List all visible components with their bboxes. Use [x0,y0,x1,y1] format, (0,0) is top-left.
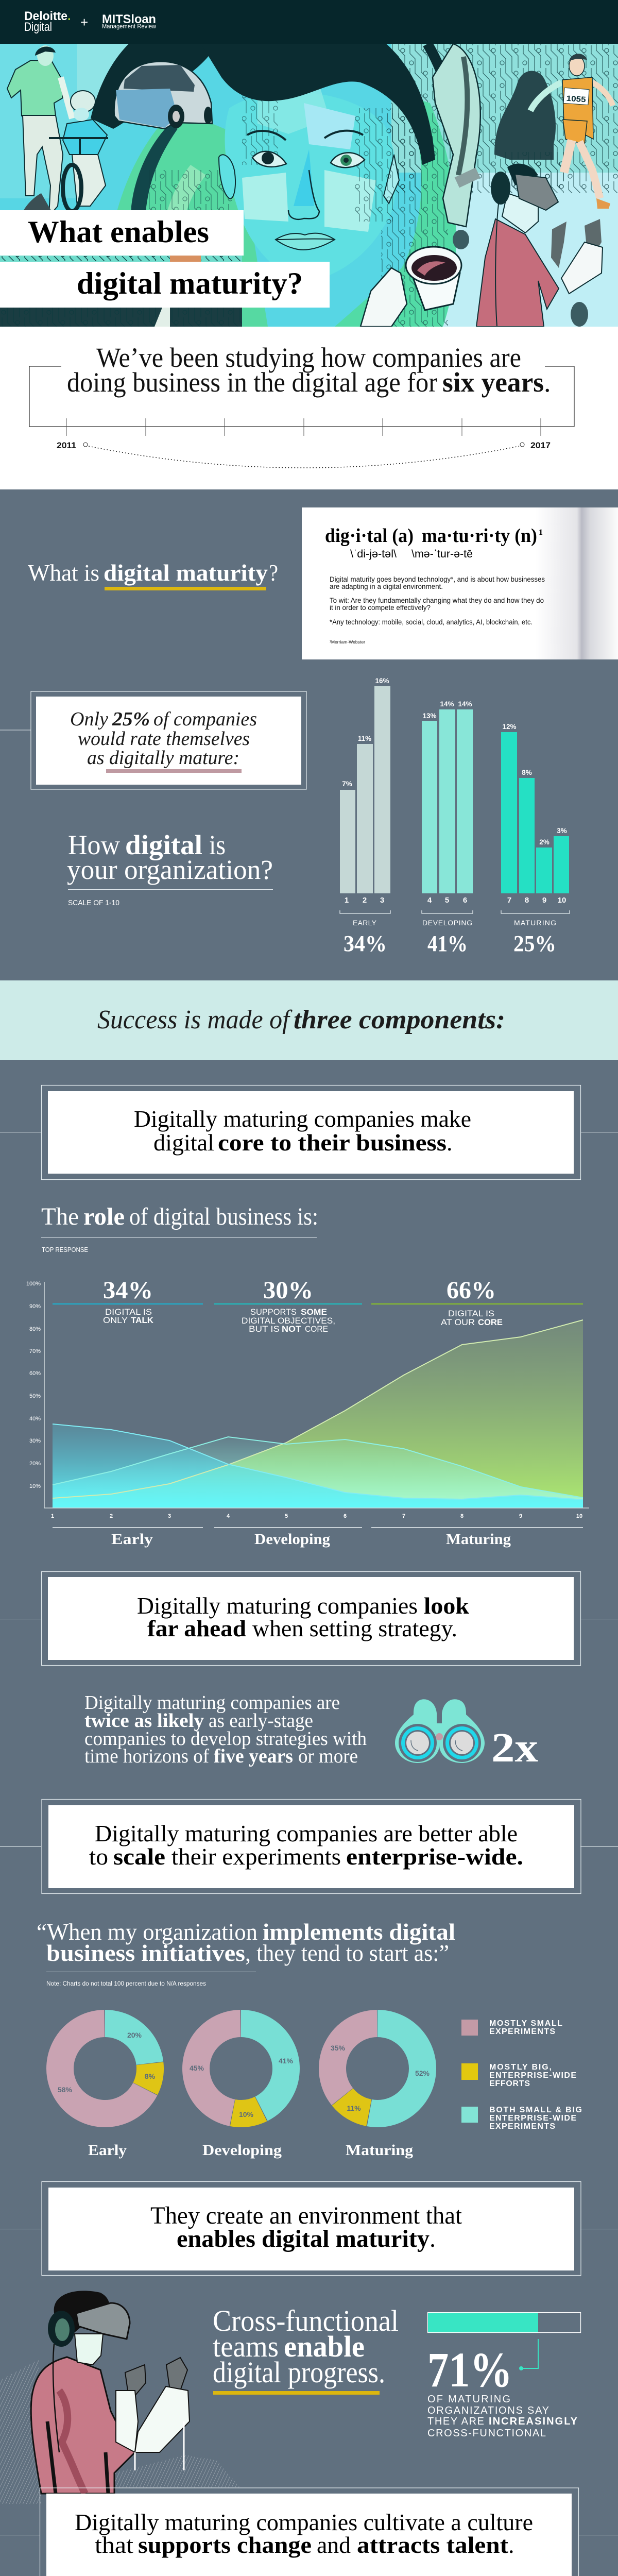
bar chart: self rating: 8% [522,769,532,776]
area chart: role of digital business: DIGITAL IS [105,1307,152,1317]
bar chart: self rating: 14% [458,700,472,708]
legend: donut charts: ENTERPRISE-WIDE [489,2114,576,2123]
heading: role of digital business: The [41,1203,79,1230]
donut charts: how initiatives start: 58% [58,2086,73,2094]
donut charts: how initiatives start: Developing [202,2142,282,2159]
heading: implements digital business initiatives: “When my organization [37,1919,258,1945]
heading: what is digital maturity: What is [28,560,99,586]
donut charts: how initiatives start: 35% [331,2044,346,2052]
area chart: role of digital business: 70% [29,1348,41,1354]
panel: core to their business: . [447,1129,452,1156]
header bar with logos: Management Review [102,23,156,30]
area chart: role of digital business: SOME [301,1307,327,1317]
area chart: role of digital business: DIGITAL OBJECTIVES, [242,1316,335,1326]
heading: what is digital maturity [28,560,278,590]
heading: cross-functional teams: digital progress. [213,2355,385,2389]
heading: cross-functional teams: teams [213,2330,279,2363]
area chart: role of digital business: NOT [282,1324,302,1334]
bar chart: self rating: 10 [558,896,566,905]
donut charts: how initiatives start: 11% [347,2104,361,2112]
header bar with logos: MITSloan [102,12,156,26]
heading: cross-functional teams: Cross-functional [213,2304,399,2337]
title: digital maturity? [77,266,303,300]
area chart: role of digital business: Maturing [446,1531,511,1548]
area chart: role of digital business: 30% [29,1438,41,1444]
callout: only 25 percent: Only [70,708,108,730]
text block: twice as likely: as early-stage [209,1710,313,1732]
definition card: ¹Merriam-Webster [330,639,365,645]
donut charts: how initiatives start: 20% [127,2031,142,2039]
heading: role of digital business [41,1203,318,1253]
intro frame and timeline: 2017 [530,440,551,450]
bar chart: self rating: 6 [463,896,467,905]
definition card: *Any technology: mobile, social, cloud, analytics, AI, blockchain, etc. [330,618,533,626]
title: What enables [28,215,209,249]
bar chart: self rating: 2 [363,896,367,905]
stat: 71 percent progress bar: CROSS-FUNCTIONAL [427,2428,546,2439]
panel: enables digital maturity: . [430,2225,436,2252]
stat: 71 percent progress bar: INCREASINGLY [489,2416,578,2427]
heading: how digital is your organization: SCALE OF 1-10 [68,899,119,907]
legend: donut charts: BOTH SMALL & BIG [489,2106,582,2114]
donut charts: how initiatives start: 52% [415,2069,430,2077]
panel: look far ahead: when setting strategy. [252,1615,457,1641]
area chart: role of digital business [26,1277,589,1548]
area chart: role of digital business: TALK [131,1315,154,1325]
donut charts: how initiatives start: Early [88,2142,127,2159]
illustration: VR user [0,2291,240,2504]
heading: implements digital business initiatives [37,1919,455,1987]
title [0,210,330,308]
bar chart: self rating: 7% [342,780,352,788]
bar chart: self rating: 2% [539,838,550,846]
stat: 71 percent progress bar: OF MATURING [427,2394,510,2405]
heading: role of digital business: TOP RESPONSE [42,1246,88,1253]
text block: twice as likely: or more [298,1745,358,1767]
area chart: role of digital business: 50% [29,1393,41,1399]
area chart: role of digital business: 20% [29,1461,41,1467]
panel: scale enterprise-wide: to [89,1843,108,1870]
bar chart: self rating: 34% [344,931,387,956]
heading: how digital is your organization: your organization? [67,854,273,885]
definition card [302,507,618,659]
bar chart: self rating: 25% [513,931,556,956]
area chart: role of digital business: 5 [285,1513,288,1519]
hero illustration [0,44,618,327]
bar chart: self rating: 12% [502,723,517,731]
heading: what is digital maturity: digital maturity [104,560,268,586]
panel: scale enterprise-wide: enterprise-wide. [346,1843,523,1870]
heading: role of digital business: of digital business is: [129,1203,318,1230]
area chart: role of digital business: Early [111,1531,153,1548]
area chart: role of digital business: SUPPORTS [250,1307,297,1317]
heading: cross-functional teams [213,2304,399,2395]
stat: 71 percent progress bar: ORGANIZATIONS SAY [427,2405,549,2416]
bar chart: self rating: 1 [345,896,349,905]
callout: only 25 percent: of companies [153,708,257,730]
panel: culture supports change and attracts talent: that [95,2532,133,2558]
legend: donut charts: EFFORTS [489,2079,530,2088]
header bar with logos: Digital [24,20,52,34]
text block: twice as likely: companies to develop strategies with [84,1728,367,1750]
panel: look far ahead: Digitally maturing companies [137,1592,418,1619]
panel: enables digital maturity: enables digital maturity [177,2225,430,2252]
legend: donut charts: ENTERPRISE-WIDE [489,2071,576,2080]
panel: core to their business: digital [153,1129,214,1156]
panel: culture supports change and attracts talent: . [508,2532,514,2558]
callout: only 25 percent: as digitally mature: [87,747,239,769]
area chart: role of digital business: 3 [168,1513,171,1519]
heading: implements digital business initiatives: implements digital [263,1919,455,1945]
intro frame and timeline: 2011 [57,440,76,450]
bar chart: self rating: 4 [427,896,432,905]
legend: donut charts: MOSTLY BIG, [489,2063,552,2072]
definition card: To wit: Are they fundamentally changing what they do and how they do [330,596,544,604]
definition card: ma·tu·ri·ty (n) [422,525,537,547]
area chart: role of digital business: 8 [460,1513,464,1519]
panel: culture supports change and attracts talent: attracts talent [357,2532,509,2558]
panel: scale enterprise-wide: scale [113,1843,165,1870]
legend: donut charts: EXPERIMENTS [489,2122,555,2131]
area chart: role of digital business: 40% [29,1416,41,1422]
intro frame and timeline: We’ve been studying how companies are [96,342,521,373]
area chart: role of digital business: BUT IS [249,1324,280,1334]
area chart: role of digital business: 4 [227,1513,230,1519]
bar chart: self rating: 8 [525,896,529,905]
donut charts: how initiatives start: 8% [145,2072,156,2080]
bar chart: self rating: EARLY [353,919,377,927]
legend: donut charts: EXPERIMENTS [489,2027,555,2036]
panel: scale enterprise-wide [0,1799,618,1894]
bar chart: self rating: 3 [380,896,384,905]
text block: twice as likely: twice as likely [84,1710,204,1732]
bar chart: self rating: DEVELOPING [422,919,472,927]
area chart: role of digital business: 34% [103,1277,153,1304]
panel: enables digital maturity [0,2181,618,2275]
area chart: role of digital business: CORE [478,1317,503,1327]
text block: twice as likely [84,1692,367,1767]
area chart: role of digital business: 60% [29,1370,41,1377]
panel: core to their business [0,1085,618,1180]
panel: scale enterprise-wide: Digitally maturing companies are better able [95,1820,518,1846]
donut charts: how initiatives start: 41% [279,2057,294,2065]
text block: twice as likely: five years [214,1745,293,1767]
heading: three components: three components: [294,1005,505,1035]
area chart: role of digital business: Developing [254,1531,330,1548]
area chart: role of digital business: 6 [344,1513,347,1519]
header bar with logos: Deloitte [24,9,67,23]
callout: only 25 percent: would rate themselves [78,728,250,750]
panel: core to their business: core to their business [218,1129,447,1156]
bar chart: self rating [340,677,570,956]
stat: 71 percent progress bar [427,2312,581,2439]
donut charts: how initiatives start [44,2005,441,2159]
definition card: \ˈdi-jə-təl\ [350,548,397,560]
heading: how digital is your organization: How [68,829,120,860]
bar chart: self rating: 3% [557,827,567,835]
intro frame and timeline: doing business in the digital age for [67,367,437,398]
area chart: role of digital business: 9 [519,1513,522,1519]
header bar with logos [0,0,618,44]
area chart: role of digital business: ONLY [103,1315,128,1325]
panel: culture supports change and attracts talent: Digitally maturing companies cultivate a culture [75,2509,533,2535]
area chart: role of digital business: 10% [29,1483,41,1489]
panel: scale enterprise-wide: their experiments [171,1843,341,1870]
legend: donut charts [461,2019,582,2131]
heading: implements digital business initiatives: business initiatives [46,1940,245,1966]
panel: culture supports change and attracts talent [0,2488,618,2576]
text block: twice as likely: time horizons of [84,1745,209,1767]
definition card: dig·i·tal (a) [325,525,414,547]
heading: three components: Success is made of [97,1005,293,1035]
area chart: role of digital business: 90% [29,1303,41,1310]
bar chart: self rating: 13% [422,712,437,720]
stat: 71 percent progress bar: 71% [427,2342,512,2397]
icon: binoculars [395,1699,485,1763]
hero illustration: 1055 [566,94,586,104]
panel: culture supports change and attracts talent: and [317,2532,351,2558]
heading: cross-functional teams: enable [284,2330,365,2363]
heading: implements digital business initiatives: Note: Charts do not total 100 percent due to N/A responses [46,1981,206,1987]
area chart: role of digital business: DIGITAL IS [448,1309,494,1318]
panel: culture supports change and attracts talent: supports change [138,2532,312,2558]
area chart: role of digital business: 66% [447,1277,496,1304]
bar chart: self rating: 16% [375,677,389,685]
heading: how digital is your organization: is [209,829,226,860]
intro frame and timeline [29,342,574,468]
panel: look far ahead: far ahead [147,1615,246,1641]
bar chart: self rating: 14% [440,700,454,708]
bar chart: self rating: 41% [427,931,468,956]
donut charts: how initiatives start: Maturing [346,2142,413,2159]
area chart: role of digital business: 1 [51,1513,54,1519]
header bar with logos: + [80,14,88,30]
area chart: role of digital business: CORE [305,1324,328,1334]
definition card: it in order to compete effectively? [330,603,431,612]
panel: look far ahead: look [424,1592,469,1619]
heading: three components [97,1005,505,1035]
stat: 2x: 2x [491,1725,538,1771]
area chart: role of digital business: 7 [402,1513,405,1519]
definition card: 1 [539,528,543,537]
donut charts: how initiatives start: 45% [190,2064,204,2072]
legend: donut charts: MOSTLY SMALL [489,2019,562,2028]
intro frame and timeline: . [544,367,551,398]
bar chart: self rating: 7 [507,896,511,905]
area chart: role of digital business: 10 [576,1513,582,1519]
header bar with logos: . [67,9,71,23]
definition card: \mə-ˈtur-ə-tē [411,548,473,560]
bar chart: self rating: 5 [445,896,449,905]
bar chart: self rating: 9 [542,896,546,905]
definition card: Digital maturity goes beyond technology*, and is about how businesses [330,575,545,583]
heading: how digital is your organization [67,829,273,907]
panel: core to their business: Digitally maturing companies make [134,1106,471,1132]
area chart: role of digital business: 100% [26,1281,41,1287]
panel: enables digital maturity: They create an environment that [150,2202,462,2229]
callout: only 25 percent: 25% [112,708,150,730]
area chart: role of digital business: AT OUR [441,1317,475,1327]
text block: twice as likely: Digitally maturing companies are [84,1692,340,1714]
definition card: are adapting in a digital environment. [330,582,443,590]
heading: role of digital business: role [83,1203,125,1230]
area chart: role of digital business: 80% [29,1326,41,1332]
donut charts: how initiatives start: 10% [239,2110,254,2119]
area chart: role of digital business: 2 [110,1513,113,1519]
panel: look far ahead [0,1571,618,1665]
heading: what is digital maturity: ? [269,560,278,586]
area chart: role of digital business: 30% [263,1277,313,1304]
bar chart: self rating: 11% [358,735,371,742]
bar chart: self rating: MATURING [514,919,556,927]
callout: only 25 percent [0,691,306,789]
heading: implements digital business initiatives: , they tend to start as:” [245,1940,449,1966]
intro frame and timeline: six years [442,367,544,398]
heading: how digital is your organization: digital [125,829,202,860]
stat: 71 percent progress bar: THEY ARE [427,2416,484,2427]
